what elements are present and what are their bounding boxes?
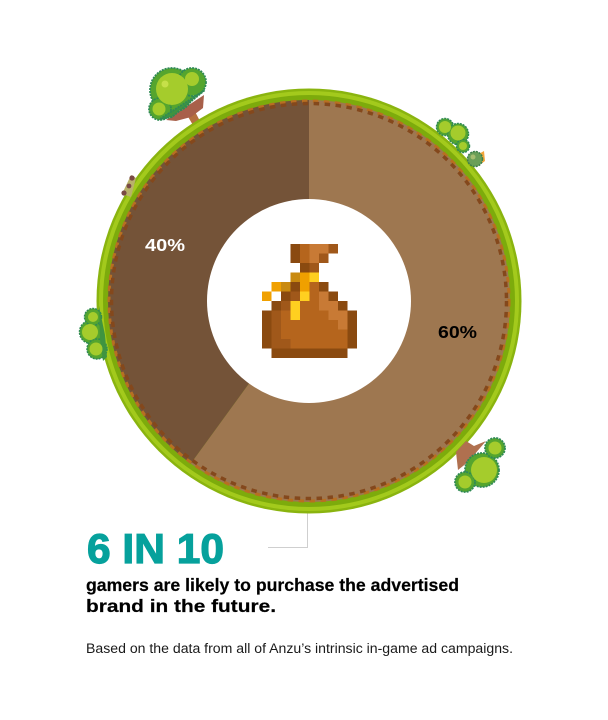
amber pixels [281,272,300,292]
tree: left [80,306,107,361]
label: 40%: 40% [145,235,185,255]
subheading: gamers are likely to purchase the advertised [86,575,459,595]
subheading [86,575,459,616]
connector line [268,513,308,548]
segment: 60 percent [189,97,513,505]
rock: left [121,175,136,197]
subheading: brand in the future. [86,596,276,616]
grass ring [96,88,522,514]
segment: 40 percent [105,97,309,466]
light pixels [310,244,348,330]
tree trunk: top left [183,104,201,127]
tree: top left [149,68,206,121]
headline: 6 IN 10: 6 IN 10 [87,525,224,572]
dark pixels [262,244,357,358]
yellow pixels [290,272,319,320]
bush and orange flower: top right [468,151,485,166]
icon: money bag [262,244,357,358]
tree: bottom right [455,438,505,492]
donut chart [96,88,522,514]
source note: Based on the data from all of Anzu’s intrinsic in-game ad campaigns. [86,641,513,656]
center hole [207,199,411,403]
label: 60%: 60% [438,322,477,342]
orange pixels [262,272,310,301]
mid pixels [281,244,348,349]
medium-dark pixels [272,244,338,349]
tree: top right [436,118,470,152]
